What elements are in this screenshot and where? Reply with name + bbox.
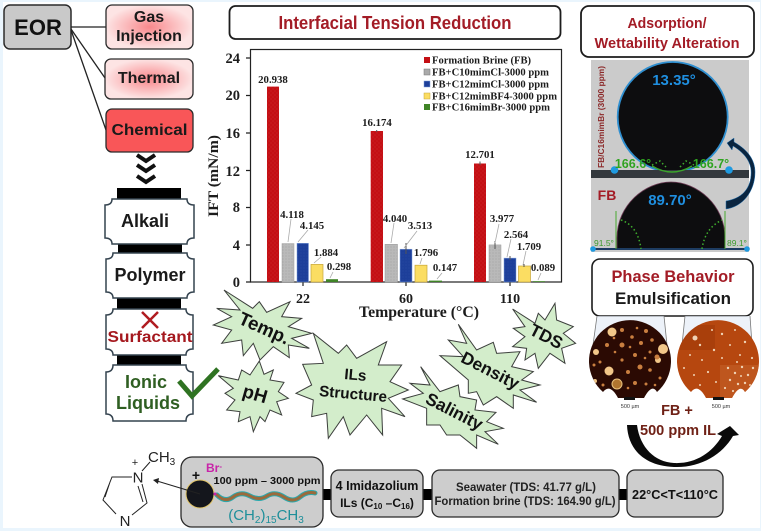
icon: red cross (142, 312, 158, 328)
Ionic Liquids box: Ionic (125, 372, 167, 392)
star: Density (440, 324, 540, 408)
star: pH (218, 361, 288, 432)
data labels: 0.298 (327, 261, 352, 273)
Ionic Liquids box: Liquids (116, 393, 180, 413)
contact angle panel: FB: 91.5° (594, 238, 614, 248)
micrograph: before (589, 320, 671, 398)
box: ionic liquid structure: ) (260, 507, 265, 524)
x axis: 60 (399, 292, 413, 307)
Gas Injection box: Gas (134, 9, 164, 26)
box: ionic liquid structure (181, 457, 323, 527)
arrow: wettability change (726, 138, 755, 209)
heading: Phase Behavior Emulsification (592, 259, 753, 316)
EOR box: EOR (14, 15, 62, 40)
box: ionic liquid structure: - (219, 462, 222, 471)
bar chart: IFT (206, 50, 562, 321)
Thermal box (105, 59, 193, 99)
box: ionic liquid structure: CH (277, 507, 298, 524)
contact angle panel: treated: 166.7° (693, 157, 729, 171)
bars 60 C (371, 131, 442, 282)
molecule: imidazolium: N (133, 470, 143, 486)
box: 4 Imidazolium ILs: 4 Imidazolium (336, 479, 418, 493)
y axis: 16 (226, 126, 240, 142)
star: Temp. (213, 290, 312, 360)
Gas Injection box (106, 5, 193, 49)
Alkali box (105, 199, 194, 244)
Gas Injection box: Injection (116, 28, 182, 45)
data labels: 1.709 (517, 241, 542, 253)
box: 4 Imidazolium ILs: ) (410, 496, 414, 510)
data labels: 2.564 (504, 229, 529, 241)
data labels: 1.796 (414, 247, 439, 259)
star: TDS (513, 303, 576, 368)
scale bars: 500 µm (621, 404, 640, 410)
star: ILs Structure: ILs (344, 366, 367, 385)
chevrons (137, 155, 155, 182)
y axis: 8 (233, 200, 240, 216)
Surfactant box (106, 309, 193, 355)
Chemical box (106, 109, 193, 152)
data labels: 4.145 (300, 220, 324, 232)
box: 4 Imidazolium ILs: 10 (373, 502, 383, 511)
molecule: imidazolium: N (120, 513, 130, 530)
Alkali box: Alkali (121, 211, 169, 231)
star: pH: pH (240, 380, 270, 407)
contact angle panel: FB: 89.70° (648, 192, 692, 209)
scale bars: 500 µm (712, 404, 731, 410)
molecule: imidazolium: + (132, 457, 138, 469)
Thermal box: Thermal (118, 70, 180, 87)
factor stars (213, 290, 576, 448)
icon: green check (179, 369, 218, 396)
legend: FB+C12mimBF4-3000 ppm (432, 92, 557, 102)
label: FB + 500 ppm IL: FB + (661, 403, 693, 419)
connector bars: bottom row (323, 489, 628, 500)
data labels: 3.513 (408, 220, 433, 232)
molecule: imidazolium: 3 (170, 457, 176, 468)
Chemical box: Chemical (112, 122, 188, 139)
data labels: 4.040 (383, 213, 407, 225)
heading: Adsorption / Wettability Alteration (581, 6, 754, 57)
Ionic Liquids box (106, 365, 193, 421)
box: ionic liquid structure: (CH (228, 507, 255, 524)
heading: Phase Behavior Emulsification: Phase Behavior (612, 268, 735, 286)
flange bars (117, 188, 182, 365)
title: Interfacial Tension Reduction: Interfacial Tension Reduction (278, 13, 512, 33)
bars 22 C (267, 87, 338, 282)
legend: Formation Brine (FB) (432, 56, 531, 66)
box: temperature range: 22°C<T<110°C (632, 487, 719, 502)
y axis: IFT (mN/m) (206, 135, 222, 217)
bars 110 C (474, 164, 545, 282)
y axis: 0 (233, 275, 240, 291)
star: TDS: TDS (526, 320, 566, 353)
contact angle panel: FB: FB (598, 187, 616, 203)
box: 4 Imidazolium ILs: –C (382, 496, 401, 510)
box: temperature range (627, 470, 723, 517)
y axis: 20 (226, 88, 240, 104)
contact angle panel: treated: FB/C16mimBr (3000 ppm) (597, 66, 606, 168)
star: ILs Structure: Structure (318, 383, 388, 406)
heading: Phase Behavior Emulsification: Emulsification (615, 290, 731, 308)
box: 4 Imidazolium ILs: ILs (C (340, 496, 373, 510)
y axis: 12 (226, 164, 240, 180)
y axis: 4 (233, 238, 240, 254)
box: ionic liquid structure: Br (206, 461, 219, 475)
star: Temp.: Temp. (236, 308, 293, 349)
arrow: curved black (627, 425, 739, 467)
Surfactant box: Surfactant (108, 329, 193, 346)
label: FB + 500 ppm IL (640, 403, 716, 439)
legend: FB+C10mimCl-3000 ppm (432, 68, 549, 78)
legend: FB+C12mimCl-3000 ppm (432, 80, 549, 90)
box: 4 Imidazolium ILs: 16 (401, 502, 410, 511)
heading: Adsorption / Wettability Alteration: Wettability Alteration (594, 36, 740, 52)
title: Interfacial Tension Reduction (230, 6, 560, 39)
contact angle panel: treated: 13.35° (652, 72, 696, 89)
box: ionic liquid structure: 2 (255, 515, 261, 526)
box: seawater and formation brine: Formation brine (TDS: 164.90 g/L) (434, 496, 616, 508)
micrograph: after (677, 320, 759, 398)
molecule: imidazolium: CH (148, 449, 170, 466)
Polymer box: Polymer (114, 265, 186, 285)
EOR box (4, 5, 71, 49)
y axis: 24 (226, 51, 240, 67)
contact angle panel: FB (590, 180, 750, 252)
arrow: structure to molecule (153, 478, 200, 494)
heading: Adsorption / Wettability Alteration: Adsorption/ (628, 16, 706, 32)
alkyl chain (217, 492, 315, 500)
label: FB + 500 ppm IL: 500 ppm IL (640, 423, 716, 439)
molecule: imidazolium (103, 449, 176, 530)
box: ionic liquid structure: 15 (265, 515, 277, 526)
data labels: 3.977 (490, 213, 515, 225)
leader lines (288, 219, 541, 280)
box: ionic liquid structure: + (192, 467, 200, 483)
box: seawater and formation brine (432, 470, 619, 517)
legend (424, 56, 557, 114)
Polymer box (106, 253, 194, 298)
data labels: 4.118 (280, 209, 304, 221)
contact angle panel: treated (591, 60, 749, 180)
box: ionic liquid structure: 3 (298, 515, 304, 526)
legend: FB+C16mimBr-3000 ppm (432, 102, 550, 114)
x axis: Temperature (°C) (359, 304, 479, 321)
x axis: 22 (296, 292, 310, 307)
star: ILs Structure (296, 333, 408, 438)
data labels: 20.938 (258, 74, 288, 86)
contact angle panel: treated: 166.6° (615, 157, 651, 171)
scale bars (621, 397, 731, 410)
box: ionic liquid structure: 100 ppm – 3000 ppm (214, 476, 321, 487)
star: Salinity (403, 367, 503, 448)
data labels: 0.089 (531, 262, 556, 274)
data labels: 1.884 (314, 247, 339, 259)
contact angle panel: FB: 89.1° (727, 238, 747, 248)
star: Salinity: Salinity (422, 388, 487, 434)
box: 4 Imidazolium ILs (331, 470, 423, 517)
data labels: 16.174 (362, 117, 392, 129)
magnifier guides (593, 316, 752, 345)
x axis: 110 (500, 292, 520, 307)
data labels (258, 74, 556, 274)
data labels: 0.147 (433, 262, 458, 274)
data labels: 12.701 (465, 149, 495, 161)
error bars (377, 130, 524, 267)
star: Density: Density (458, 347, 523, 394)
x axis (296, 282, 520, 321)
box: seawater and formation brine: Seawater (TDS: 41.77 g/L) (456, 482, 596, 494)
connector lines from EOR (71, 27, 106, 130)
y axis (206, 51, 251, 291)
